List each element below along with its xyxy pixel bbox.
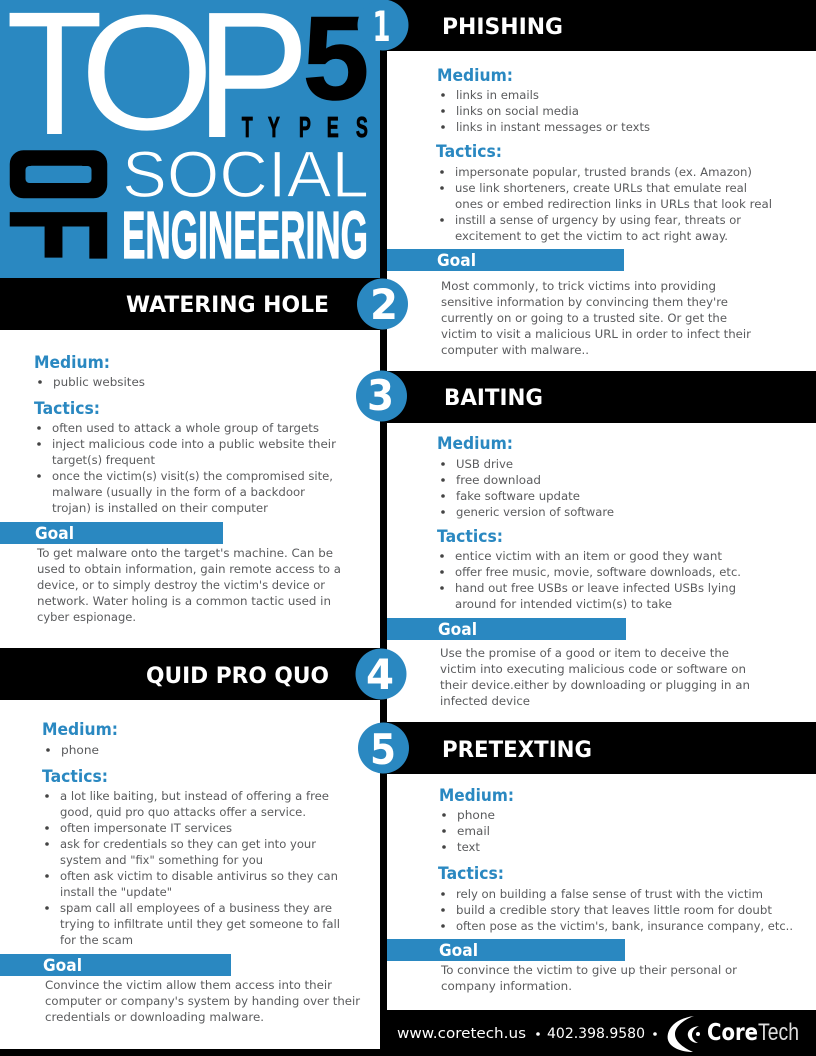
goal text xyxy=(440,646,750,708)
tactics list xyxy=(37,421,336,515)
goal text xyxy=(36,546,341,624)
medium list xyxy=(441,88,650,134)
medium list: links in instant messages or texts xyxy=(456,120,650,134)
goal text: Most commonly, to trick victims into providing xyxy=(441,279,716,293)
tactics list: use link shorteners, create URLs that emulate real xyxy=(455,181,747,195)
heading: tactics: Tactics: xyxy=(437,527,503,546)
band: watering hole xyxy=(0,278,387,330)
logo wordmark: Core xyxy=(707,1020,758,1046)
title word: ENGINEERING: ENGINEERING xyxy=(122,198,368,273)
number badge 2 xyxy=(357,278,408,330)
goal text: victim into executing malicious code or software on xyxy=(440,662,746,676)
tactics list: often impersonate IT services xyxy=(60,821,232,835)
goal text: device, or to simply destroy the victim's device or xyxy=(37,578,325,592)
section: baiting xyxy=(387,434,750,708)
tactics list: rely on building a false sense of trust with the victim xyxy=(456,887,763,901)
tactics list xyxy=(440,549,741,611)
title word: TYPES: TYPES xyxy=(242,112,368,144)
goal bar xyxy=(0,954,231,976)
tactics list: install the "update" xyxy=(60,885,172,899)
tactics list: once the victim(s) visit(s) the compromised site, xyxy=(52,469,333,483)
band: baiting: BAITING xyxy=(444,386,543,411)
goal text: used to obtain information, gain remote access to a xyxy=(37,562,341,576)
section: watering hole xyxy=(0,353,341,624)
goal text: infected device xyxy=(440,694,530,708)
tactics list: malware (usually in the form of a backdoor xyxy=(52,485,305,499)
medium list xyxy=(441,457,614,519)
heading: medium: Medium: xyxy=(42,720,118,739)
goal bar: Goal xyxy=(438,620,477,639)
tactics list: trojan) is installed on their computer xyxy=(52,501,268,515)
medium list xyxy=(46,743,99,757)
tactics list: often pose as the victim's, bank, insurance company, etc.. xyxy=(456,919,793,933)
goal bar xyxy=(387,618,626,640)
top band: phishing xyxy=(380,0,816,51)
medium list: free download xyxy=(456,473,541,487)
goal text: computer or company's system by handing over their xyxy=(45,994,360,1008)
tactics list: for the scam xyxy=(60,933,133,947)
number badge 5 xyxy=(358,722,409,774)
goal text: To get malware onto the target's machine. Can be xyxy=(36,546,333,560)
goal text: cyber espionage. xyxy=(37,610,136,624)
medium list: USB drive xyxy=(456,457,513,471)
heading: tactics: Tactics: xyxy=(436,142,502,161)
goal text: computer with malware.. xyxy=(441,343,589,357)
tactics list: spam call all employees of a business they are xyxy=(60,901,332,915)
logo wordmark light: Tech xyxy=(758,1019,799,1046)
goal text: credentials or downloading malware. xyxy=(45,1010,264,1024)
tactics list: instill a sense of urgency by using fear, threats or xyxy=(455,213,741,227)
medium list: public websites xyxy=(53,375,145,389)
tactics list xyxy=(441,887,793,933)
footer contact details: www.coretech.us xyxy=(397,1026,526,1042)
bottom left strip xyxy=(0,1049,387,1056)
goal bar: Goal xyxy=(439,941,478,960)
tactics list: ask for credentials so they can get into your xyxy=(60,837,316,851)
goal text: currently on or going to a trusted site. Or get the xyxy=(441,311,727,325)
medium list: generic version of software xyxy=(456,505,614,519)
heading: medium: Medium: xyxy=(439,786,514,805)
tactics list: good, quid pro quo attacks offer a service. xyxy=(60,805,306,819)
tactics list: a lot like baiting, but instead of offering a free xyxy=(60,789,329,803)
number badge 4: 4 xyxy=(366,650,394,699)
goal bar: Goal xyxy=(437,251,476,270)
footer contact details: 402.398.9580 xyxy=(547,1026,645,1042)
tactics list: target(s) frequent xyxy=(52,453,155,467)
tactics list: offer free music, movie, software downloads, etc. xyxy=(455,565,741,579)
medium list xyxy=(442,808,495,854)
footer contact details xyxy=(397,1026,657,1042)
number badge 3: 3 xyxy=(367,371,394,420)
tactics list: excitement to get the victim to act right away. xyxy=(455,229,728,243)
tactics list: system and "fix" something for you xyxy=(60,853,263,867)
footer xyxy=(380,1010,816,1056)
number badge 1 xyxy=(358,0,408,51)
goal text: sensitive information by convincing them they're xyxy=(441,295,728,309)
medium list: text xyxy=(457,840,480,854)
number badge 1: 1 xyxy=(372,2,390,51)
section: pretexting xyxy=(387,786,793,993)
icon: coretech logo mark xyxy=(668,1016,700,1052)
heading: medium: Medium: xyxy=(437,66,513,85)
section: quid pro quo xyxy=(0,720,360,1024)
medium list: links in emails xyxy=(456,88,539,102)
number badge 3 xyxy=(356,370,407,422)
band: pretexting xyxy=(380,722,816,774)
goal bar xyxy=(387,249,624,271)
medium list: phone xyxy=(457,808,495,822)
goal text: To convince the victim to give up their personal or xyxy=(440,963,737,977)
band: quid pro quo xyxy=(0,648,387,700)
tactics list: trying to infiltrate until they get someone to fall xyxy=(60,917,340,931)
goal text: their device.either by downloading or plugging in an xyxy=(440,678,750,692)
band: baiting xyxy=(380,371,816,423)
tactics list: ones or embed redirection links in URLs that look real xyxy=(455,197,772,211)
tactics list: inject malicious code into a public website their xyxy=(52,437,336,451)
number badge 2: 2 xyxy=(370,280,398,329)
goal text: victim to visit a malicious URL in order to infect their xyxy=(441,327,751,341)
goal text xyxy=(440,963,737,993)
goal bar xyxy=(387,939,625,961)
goal text: Use the promise of a good or item to deceive the xyxy=(440,646,729,660)
medium list: phone xyxy=(61,743,99,757)
heading: medium: Medium: xyxy=(34,353,110,372)
tactics list: often ask victim to disable antivirus so they can xyxy=(60,869,338,883)
number badge 4 xyxy=(356,648,406,700)
tactics list: build a credible story that leaves little room for doubt xyxy=(456,903,772,917)
center divider xyxy=(380,0,387,1056)
medium list: links on social media xyxy=(456,104,579,118)
heading: tactics: Tactics: xyxy=(42,767,108,786)
medium list: fake software update xyxy=(456,489,580,503)
section: phishing xyxy=(387,66,772,357)
medium list: email xyxy=(457,824,490,838)
goal text xyxy=(45,978,360,1024)
goal bar: Goal xyxy=(35,524,74,543)
heading: medium: Medium: xyxy=(437,434,513,453)
band: quid pro quo: QUID PRO QUO xyxy=(146,664,329,689)
band: watering hole: WATERING HOLE xyxy=(126,293,329,318)
goal bar: Goal xyxy=(43,956,82,975)
letter O xyxy=(0,149,127,199)
goal text xyxy=(441,279,751,357)
title word: SOCIAL: SOCIAL xyxy=(122,137,369,211)
goal text: network. Water holing is a common tactic used in xyxy=(37,594,331,608)
tactics list: impersonate popular, trusted brands (ex. Amazon) xyxy=(455,165,752,179)
tactics list: entice victim with an item or good they want xyxy=(455,549,722,563)
tactics list: around for intended victim(s) to take xyxy=(455,597,672,611)
tactics list xyxy=(440,165,772,243)
tactics list: often used to attack a whole group of targets xyxy=(52,421,319,435)
goal bar xyxy=(0,522,223,544)
number badge 5: 5 xyxy=(370,725,396,774)
goal text: company information. xyxy=(441,979,572,993)
top band: phishing: PHISHING xyxy=(442,15,563,40)
heading: tactics: Tactics: xyxy=(34,399,100,418)
band: pretexting: PRETEXTING xyxy=(442,738,592,763)
tactics list xyxy=(45,789,340,947)
goal text: Convince the victim allow them access into their xyxy=(45,978,332,992)
heading: tactics: Tactics: xyxy=(438,864,504,883)
tactics list: hand out free USBs or leave infected USBs lying xyxy=(455,581,736,595)
title word: TOP xyxy=(6,0,310,176)
title word: OF rotated xyxy=(0,149,135,261)
title panel xyxy=(0,0,380,278)
